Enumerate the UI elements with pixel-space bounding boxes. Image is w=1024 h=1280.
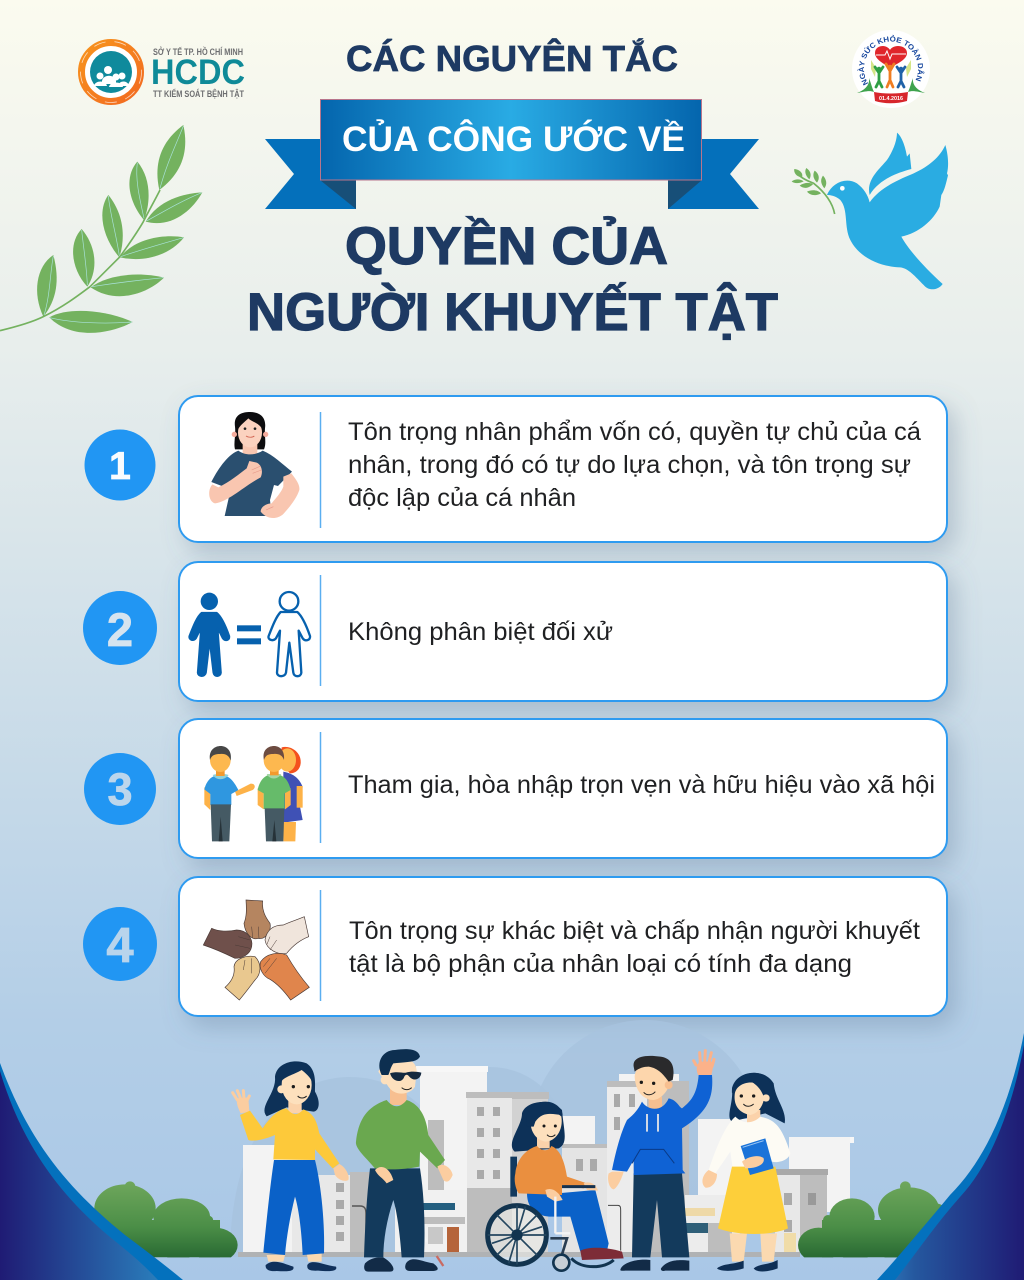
card 3	[179, 719, 947, 858]
logo: Ngày sức khỏe toàn dân: NGÀY SỨC KHỎE TOÀN DÂN	[858, 34, 924, 86]
row 2	[83, 562, 947, 701]
ribbon text: CỦA CÔNG ƯỚC VỀ	[342, 119, 685, 159]
card 2	[179, 562, 947, 701]
person: blind man with cane in green sweater	[356, 1049, 453, 1272]
row 3	[84, 719, 947, 858]
person: woman holding book in yellow skirt	[702, 1073, 790, 1271]
number badge 1	[84, 430, 156, 500]
number badge 2	[83, 591, 157, 665]
text block 1: độc lập của cá nhân	[348, 484, 576, 512]
icon: three people talking	[204, 746, 303, 841]
text block 2: Không phân biệt đối xử	[348, 618, 613, 646]
number badge 2: 2	[107, 603, 133, 656]
number badge 3	[84, 753, 156, 825]
text block 1	[348, 418, 921, 512]
corner swoosh left	[0, 1063, 183, 1280]
number badge 1: 1	[109, 445, 131, 488]
row 1	[84, 396, 947, 542]
divider	[320, 732, 322, 843]
title line 3: NGƯỜI KHUYẾT TẬT	[247, 281, 778, 342]
divider	[320, 890, 322, 1001]
logo: Ngày sức khỏe toàn dân	[852, 30, 930, 108]
text block 1: nhân, trong đó có tự do lựa chọn, và tôn trọng sự	[348, 451, 911, 479]
ribbon banner	[265, 100, 759, 209]
number badge 4	[83, 907, 157, 981]
logo: HCDC: HCDC	[151, 53, 245, 92]
number badge 3: 3	[107, 764, 133, 815]
logo: Ngày sức khỏe toàn dân: 01.4.2016	[879, 96, 903, 102]
text block 1: Tôn trọng nhân phẩm vốn có, quyền tự chủ của cá	[348, 418, 921, 446]
logo: HCDC: TT KIỂM SOÁT BỆNH TẬT	[153, 88, 244, 100]
person: woman in wheelchair	[488, 1102, 624, 1271]
card 1	[179, 396, 947, 542]
icon: equal people	[189, 592, 310, 676]
text block 4: tật là bộ phận của nhân loại có tính đa dạng	[349, 950, 852, 978]
text block 4: Tôn trọng sự khác biệt và chấp nhận người khuyết	[349, 917, 920, 945]
text block 4	[349, 917, 920, 978]
icon: five fists in a circle	[203, 900, 309, 1000]
person: young man waving in blue hoodie	[608, 1051, 714, 1271]
icon: dove with olive twig	[792, 133, 948, 289]
number badge 4: 4	[106, 919, 134, 973]
person: woman waving in yellow sweater	[233, 1061, 349, 1271]
divider	[320, 412, 322, 528]
title line 2: QUYỀN CỦA	[345, 216, 668, 276]
corner swoosh right	[877, 1033, 1024, 1280]
title line 1: CÁC NGUYÊN TẮC	[346, 37, 678, 79]
icon: olive branch	[0, 125, 202, 333]
logo: HCDC	[80, 42, 245, 102]
divider	[320, 575, 322, 686]
row 4	[83, 877, 947, 1016]
text block 3: Tham gia, hòa nhập trọn vẹn và hữu hiệu vào xã hội	[348, 771, 935, 799]
illustration: bush right	[798, 1181, 949, 1262]
logo: HCDC: SỞ Y TẾ TP. HỒ CHÍ MINH	[153, 46, 243, 58]
illustration: city backdrop	[230, 1020, 854, 1257]
card 4	[179, 877, 947, 1016]
icon: person with hand on chest	[209, 412, 299, 518]
illustration: bush left	[94, 1181, 238, 1262]
